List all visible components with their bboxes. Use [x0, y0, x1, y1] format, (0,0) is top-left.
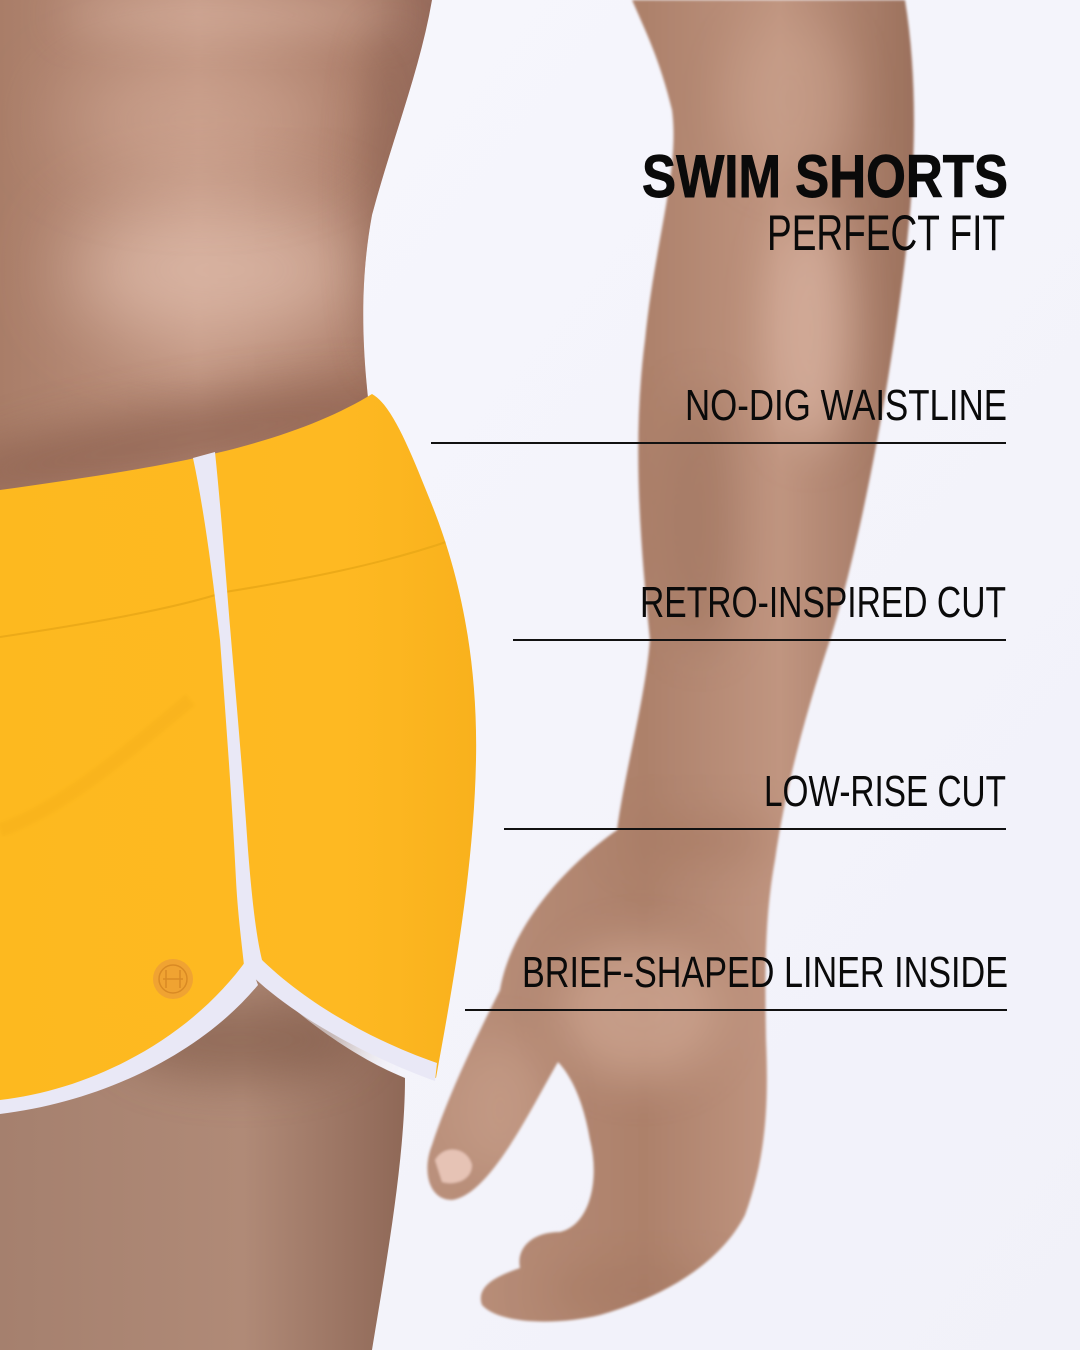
label: low-rise cut: LOW-RISE CUT [764, 767, 1006, 816]
white piping: right hem [246, 950, 437, 1081]
logo badge [153, 959, 193, 999]
photo: thigh [0, 975, 405, 1350]
photo: arm and hand [420, 0, 920, 1340]
photo: yellow swim shorts [0, 380, 490, 1120]
title: SWIM SHORTS [642, 143, 1008, 210]
white piping: left hem [0, 958, 258, 1114]
photo: torso [0, 0, 440, 530]
subtitle: PERFECT FIT [767, 205, 1005, 261]
white piping: side seam [193, 452, 268, 985]
icon: thumbnail [435, 1149, 472, 1183]
label: no-dig waistline: NO-DIG WAISTLINE [685, 381, 1007, 430]
